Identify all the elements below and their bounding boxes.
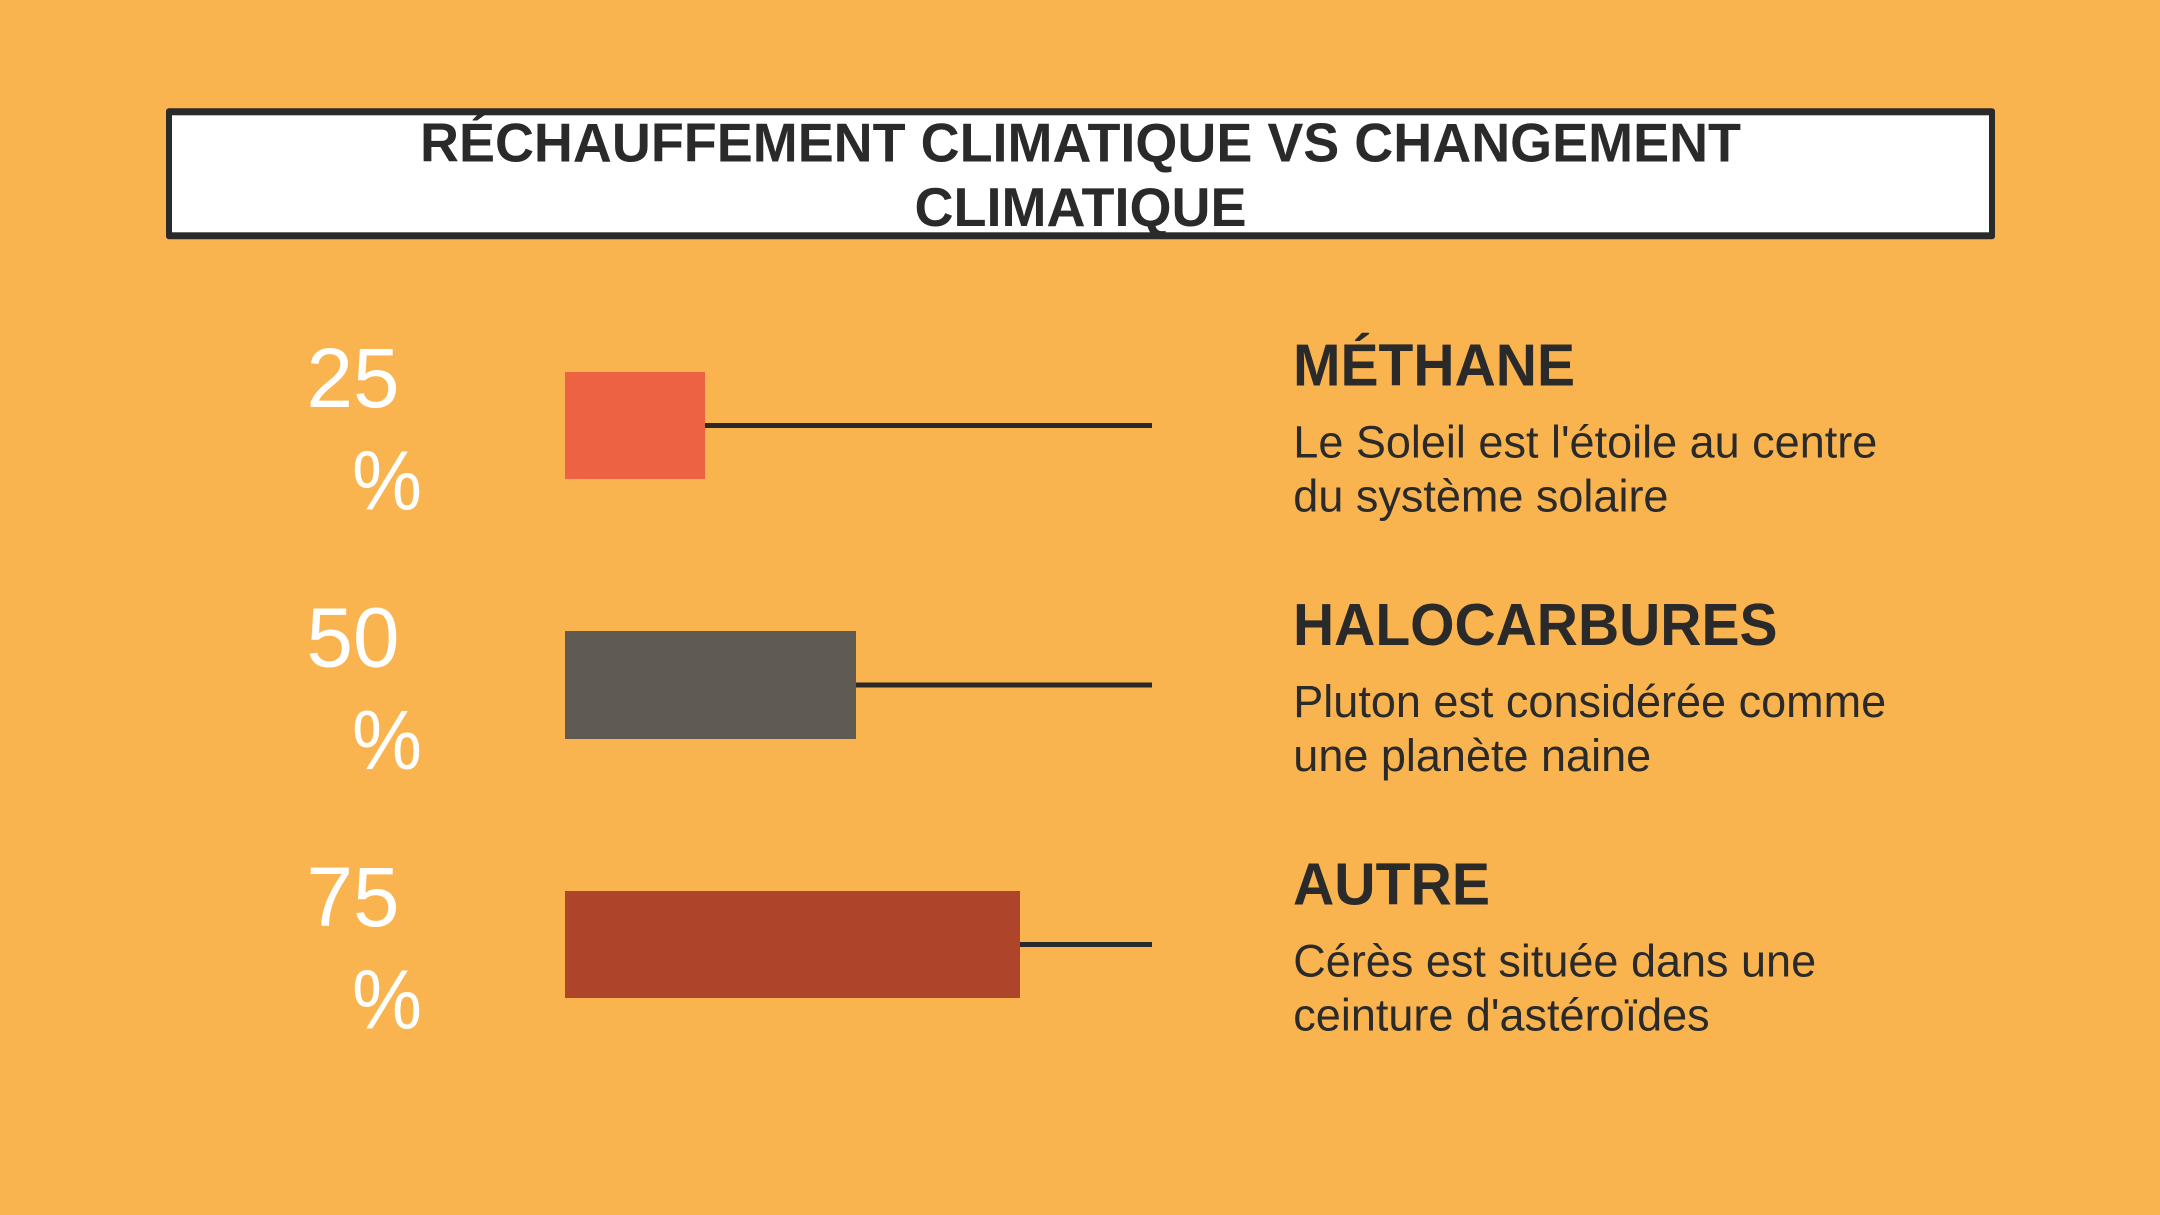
percentage: 75 %	[306, 850, 422, 1046]
description: Le Soleil est l'étoile au centre	[1293, 416, 1877, 468]
percentage: 50 %: 50	[306, 590, 400, 684]
percentage: 50 %	[306, 590, 422, 787]
row: halocarbures	[306, 590, 1886, 787]
connector line	[705, 423, 1152, 428]
description: du système solaire	[1293, 470, 1668, 522]
connector line	[856, 682, 1152, 688]
heading: méthane: MÉTHANE	[1293, 332, 1575, 398]
row: méthane	[306, 331, 1877, 528]
percentage: 25 %	[306, 331, 422, 528]
description	[1293, 676, 1886, 781]
heading: halocarbures: HALOCARBURES	[1293, 592, 1778, 658]
title	[166, 108, 1995, 239]
bar: 75%	[565, 891, 1020, 998]
bar: 50%	[565, 631, 856, 739]
percentage: 25 %: 25	[306, 331, 400, 425]
percentage: 75 %: %	[352, 952, 422, 1046]
description	[1293, 936, 1816, 1040]
connector line	[1020, 942, 1152, 947]
percentage: 75 %: 75	[306, 850, 400, 944]
percentage: 25 %: %	[352, 434, 422, 528]
bar: 25%	[565, 372, 705, 479]
description: Pluton est considérée comme	[1293, 676, 1886, 727]
title: RÉCHAUFFEMENT CLIMATIQUE VS CHANGEMENT	[420, 111, 1741, 173]
heading: autre: AUTRE	[1293, 852, 1490, 918]
description: une planète naine	[1293, 730, 1651, 781]
description	[1293, 416, 1877, 522]
percentage: 50 %: %	[352, 693, 422, 787]
row: autre	[306, 850, 1816, 1046]
description: ceinture d'astéroïdes	[1293, 990, 1710, 1040]
description: Cérès est située dans une	[1293, 936, 1816, 986]
title: CLIMATIQUE	[914, 176, 1246, 238]
